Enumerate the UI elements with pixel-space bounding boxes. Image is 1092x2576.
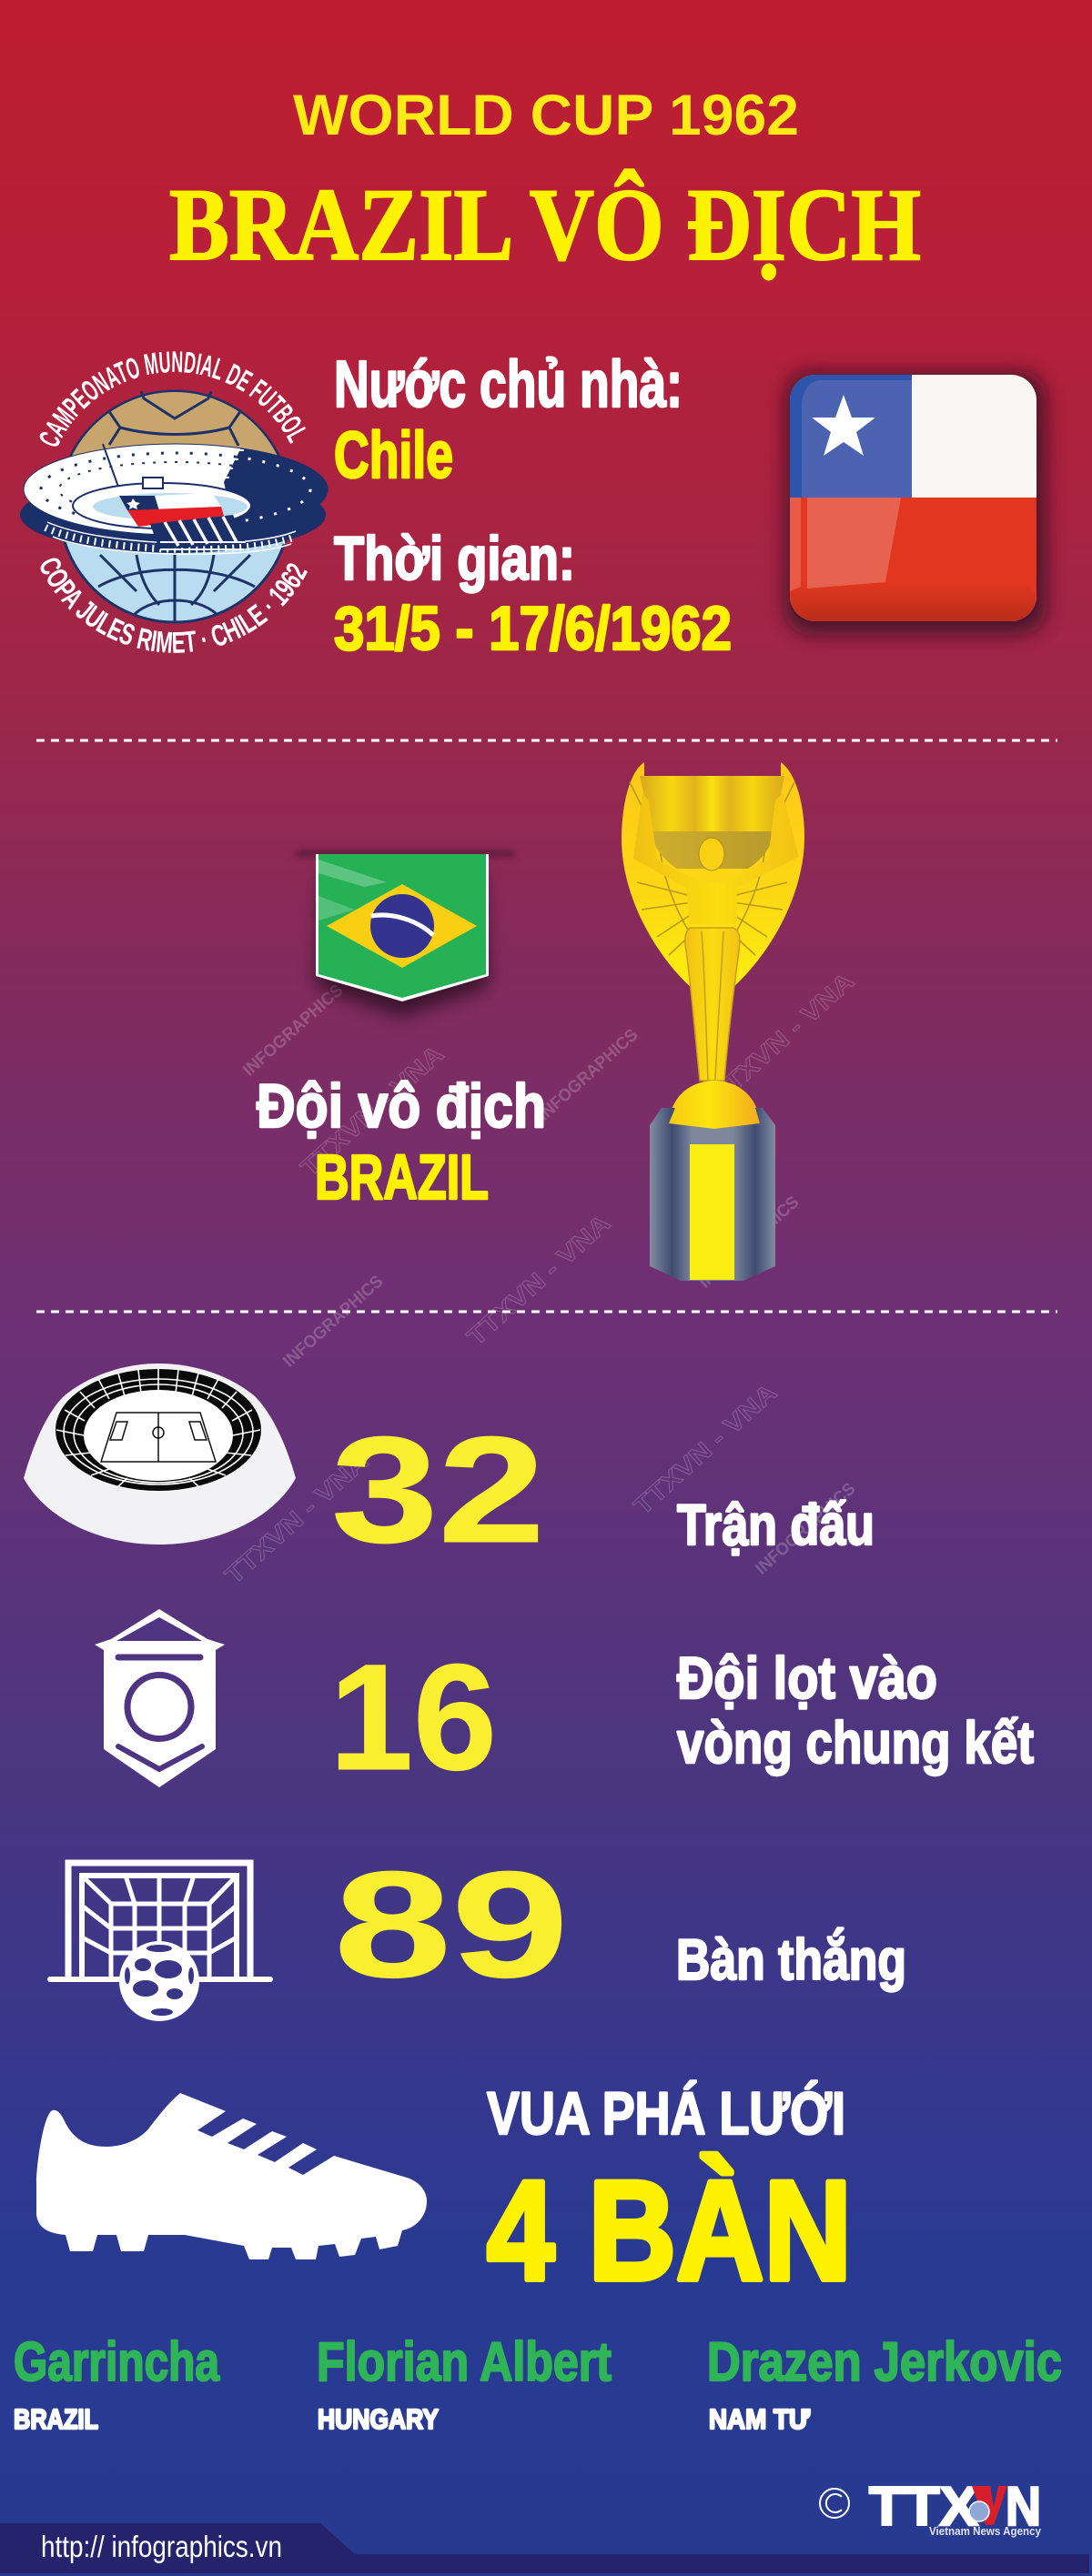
panel: top scorers bbox=[14, 2079, 1062, 2435]
logo: TTXVN bbox=[869, 2476, 1042, 2538]
panel: champion bbox=[257, 762, 804, 1281]
logo: TTXVN: Vietnam News Agency bbox=[929, 2524, 1042, 2538]
text: time label: Thời gian: bbox=[334, 524, 575, 593]
figure: four goals: 4 BÀN bbox=[487, 2152, 852, 2310]
icon: pennant bbox=[95, 1609, 225, 1787]
watermarks: INFOGRAPHICS bbox=[239, 981, 347, 1081]
watermarks: TTXVN - VNA bbox=[220, 1447, 373, 1589]
text: champion label: Đội vô địch bbox=[257, 1072, 546, 1141]
player: Garrincha bbox=[14, 2331, 219, 2435]
website link text: http:// infographics.vn bbox=[41, 2530, 282, 2563]
panel: host information bbox=[20, 348, 1060, 663]
text: dates: 31/5 - 17/6/1962 bbox=[334, 594, 732, 663]
text: host country label: Nước chủ nhà: bbox=[334, 348, 682, 421]
icon: 1962 World Cup logo: CAMPEONATO MUNDIAL DE FUTBOL bbox=[40, 351, 306, 447]
text: host country: Chile bbox=[334, 419, 453, 492]
player: Drazen Jerkovic: NAM TƯ bbox=[709, 2403, 810, 2435]
player: Drazen Jerkovic bbox=[707, 2331, 1062, 2435]
watermarks: INFOGRAPHICS bbox=[752, 1479, 859, 1579]
number: 16: 16 bbox=[329, 1634, 497, 1802]
text: champion team: BRAZIL bbox=[315, 1142, 489, 1213]
icon: Brazil flag ribbon bbox=[296, 851, 514, 1017]
label: finalist teams: Đội lọt vào bbox=[677, 1645, 937, 1711]
label: finalist teams bbox=[677, 1645, 1034, 1776]
icon: Jules Rimet trophy bbox=[622, 762, 804, 1281]
title block bbox=[169, 84, 921, 282]
player: Florian Albert: Florian Albert bbox=[317, 2331, 612, 2392]
player: Florian Albert: HUNGARY bbox=[318, 2403, 439, 2435]
logo: TTXVN: N bbox=[1006, 2476, 1041, 2537]
divider bbox=[36, 1310, 1057, 1313]
logo: TTXVN: TTX bbox=[869, 2476, 978, 2537]
watermarks: TTXVN - VNA bbox=[296, 1040, 449, 1182]
divider bbox=[36, 739, 1057, 742]
watermarks: TTXVN - VNA bbox=[629, 1378, 782, 1520]
icon: goal with ball bbox=[50, 1863, 270, 2021]
icon: football boot bbox=[36, 2093, 427, 2259]
footer bar bbox=[0, 2523, 1089, 2573]
icon: 1962 World Cup logo: COPA JULES RIMET · CHILE · 1962 bbox=[40, 558, 308, 653]
player: Florian Albert bbox=[317, 2331, 612, 2435]
watermarks: INFOGRAPHICS bbox=[534, 1025, 642, 1125]
number: 32: 32 bbox=[331, 1406, 545, 1575]
watermarks bbox=[220, 967, 859, 1589]
number: 89: 89 bbox=[334, 1841, 569, 2009]
icon: stadium bbox=[24, 1363, 296, 1545]
player: Garrincha: Garrincha bbox=[14, 2331, 219, 2392]
watermarks: INFOGRAPHICS bbox=[279, 1272, 387, 1372]
label: goals: Bàn thắng bbox=[676, 1927, 906, 1992]
heading: top scorer: VUA PHÁ LƯỚI bbox=[487, 2079, 845, 2147]
icon: 1962 World Cup logo bbox=[20, 351, 328, 653]
title: World Cup 1962: WORLD CUP 1962 bbox=[293, 84, 799, 147]
label: matches: Trận đấu bbox=[677, 1494, 875, 1557]
panel: tournament statistics bbox=[24, 1363, 1034, 2021]
watermarks: TTXVN - VNA bbox=[706, 967, 859, 1109]
watermarks: INFOGRAPHICS bbox=[695, 1192, 803, 1293]
footer bbox=[0, 2476, 1089, 2573]
title: Brazil vô địch: BRAZIL VÔ ĐỊCH bbox=[169, 168, 921, 282]
watermarks: TTXVN - VNA bbox=[462, 1209, 615, 1351]
player: Garrincha: BRAZIL bbox=[14, 2403, 98, 2435]
icon: Chile flag bbox=[784, 371, 1046, 635]
icon: copyright bbox=[820, 2489, 849, 2518]
